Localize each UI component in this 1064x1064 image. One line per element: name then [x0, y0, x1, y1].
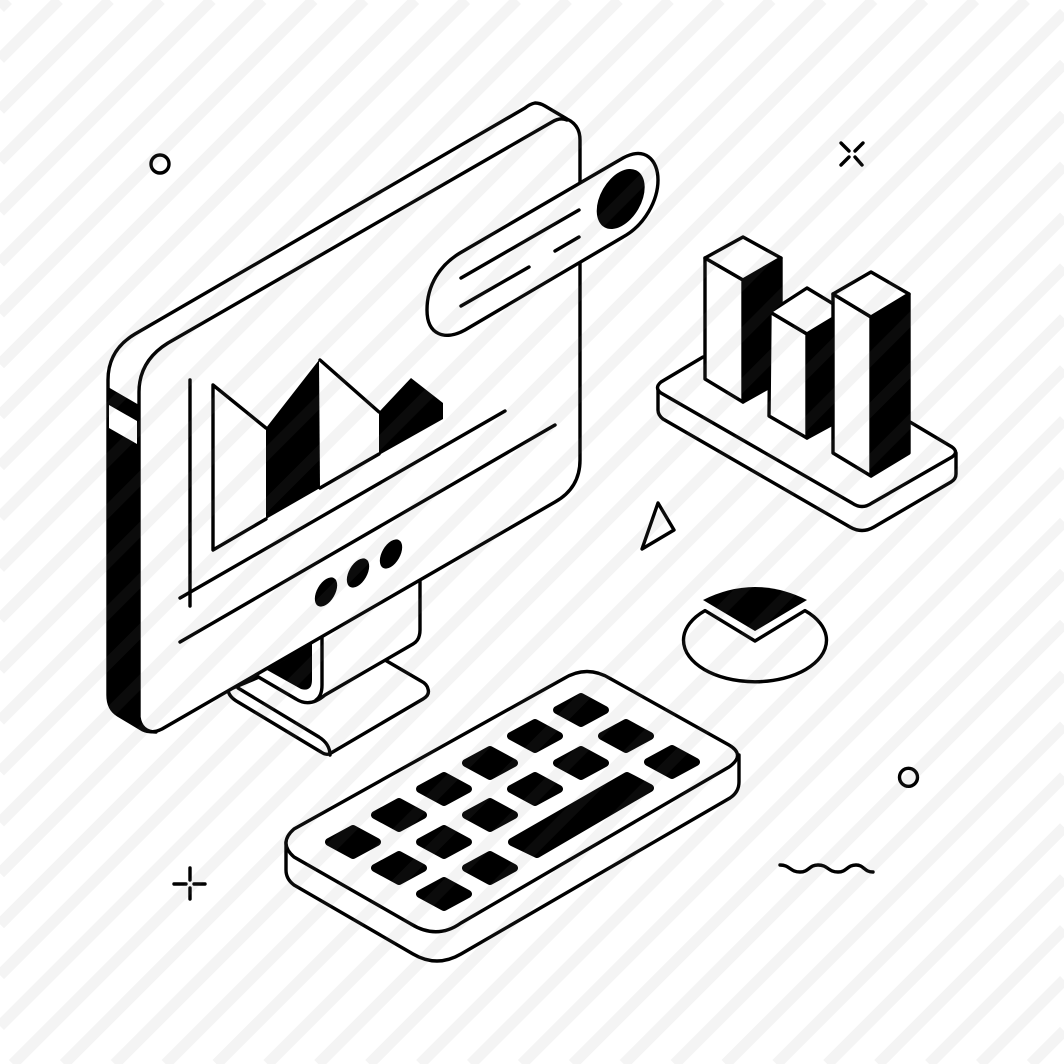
bar 2 — [769, 288, 845, 438]
cross sparkle decoration — [841, 143, 863, 165]
pill text lines — [461, 210, 579, 306]
monitor — [108, 103, 580, 732]
keyboard top — [286, 672, 738, 932]
plus sparkle decoration — [174, 868, 205, 899]
notification pill — [427, 154, 658, 335]
bar 1 — [705, 237, 781, 402]
pie body — [684, 611, 827, 682]
monitor buttons — [310, 536, 407, 610]
area chart — [213, 360, 443, 550]
ring decoration right — [900, 768, 918, 786]
triangle decoration — [642, 503, 674, 549]
monitor stand — [228, 578, 428, 755]
ring decoration left — [151, 155, 169, 173]
keyboard keys — [329, 697, 696, 907]
wave decoration — [780, 865, 873, 872]
3D bar chart — [658, 237, 956, 530]
bar chart base — [658, 357, 956, 530]
stand neck — [255, 578, 420, 703]
baseline under chart — [180, 425, 555, 642]
stand base plate — [228, 660, 428, 755]
chart axes — [180, 380, 505, 606]
pie slice — [703, 587, 807, 631]
monitor casing — [108, 103, 580, 732]
monitor side panel — [108, 387, 146, 732]
pill avatar — [587, 161, 655, 237]
monitor screen face — [139, 119, 567, 732]
bar 3 — [833, 272, 909, 476]
pie chart — [684, 587, 827, 682]
space bar — [512, 776, 650, 854]
keyboard — [286, 672, 739, 961]
keyboard side — [286, 755, 739, 961]
